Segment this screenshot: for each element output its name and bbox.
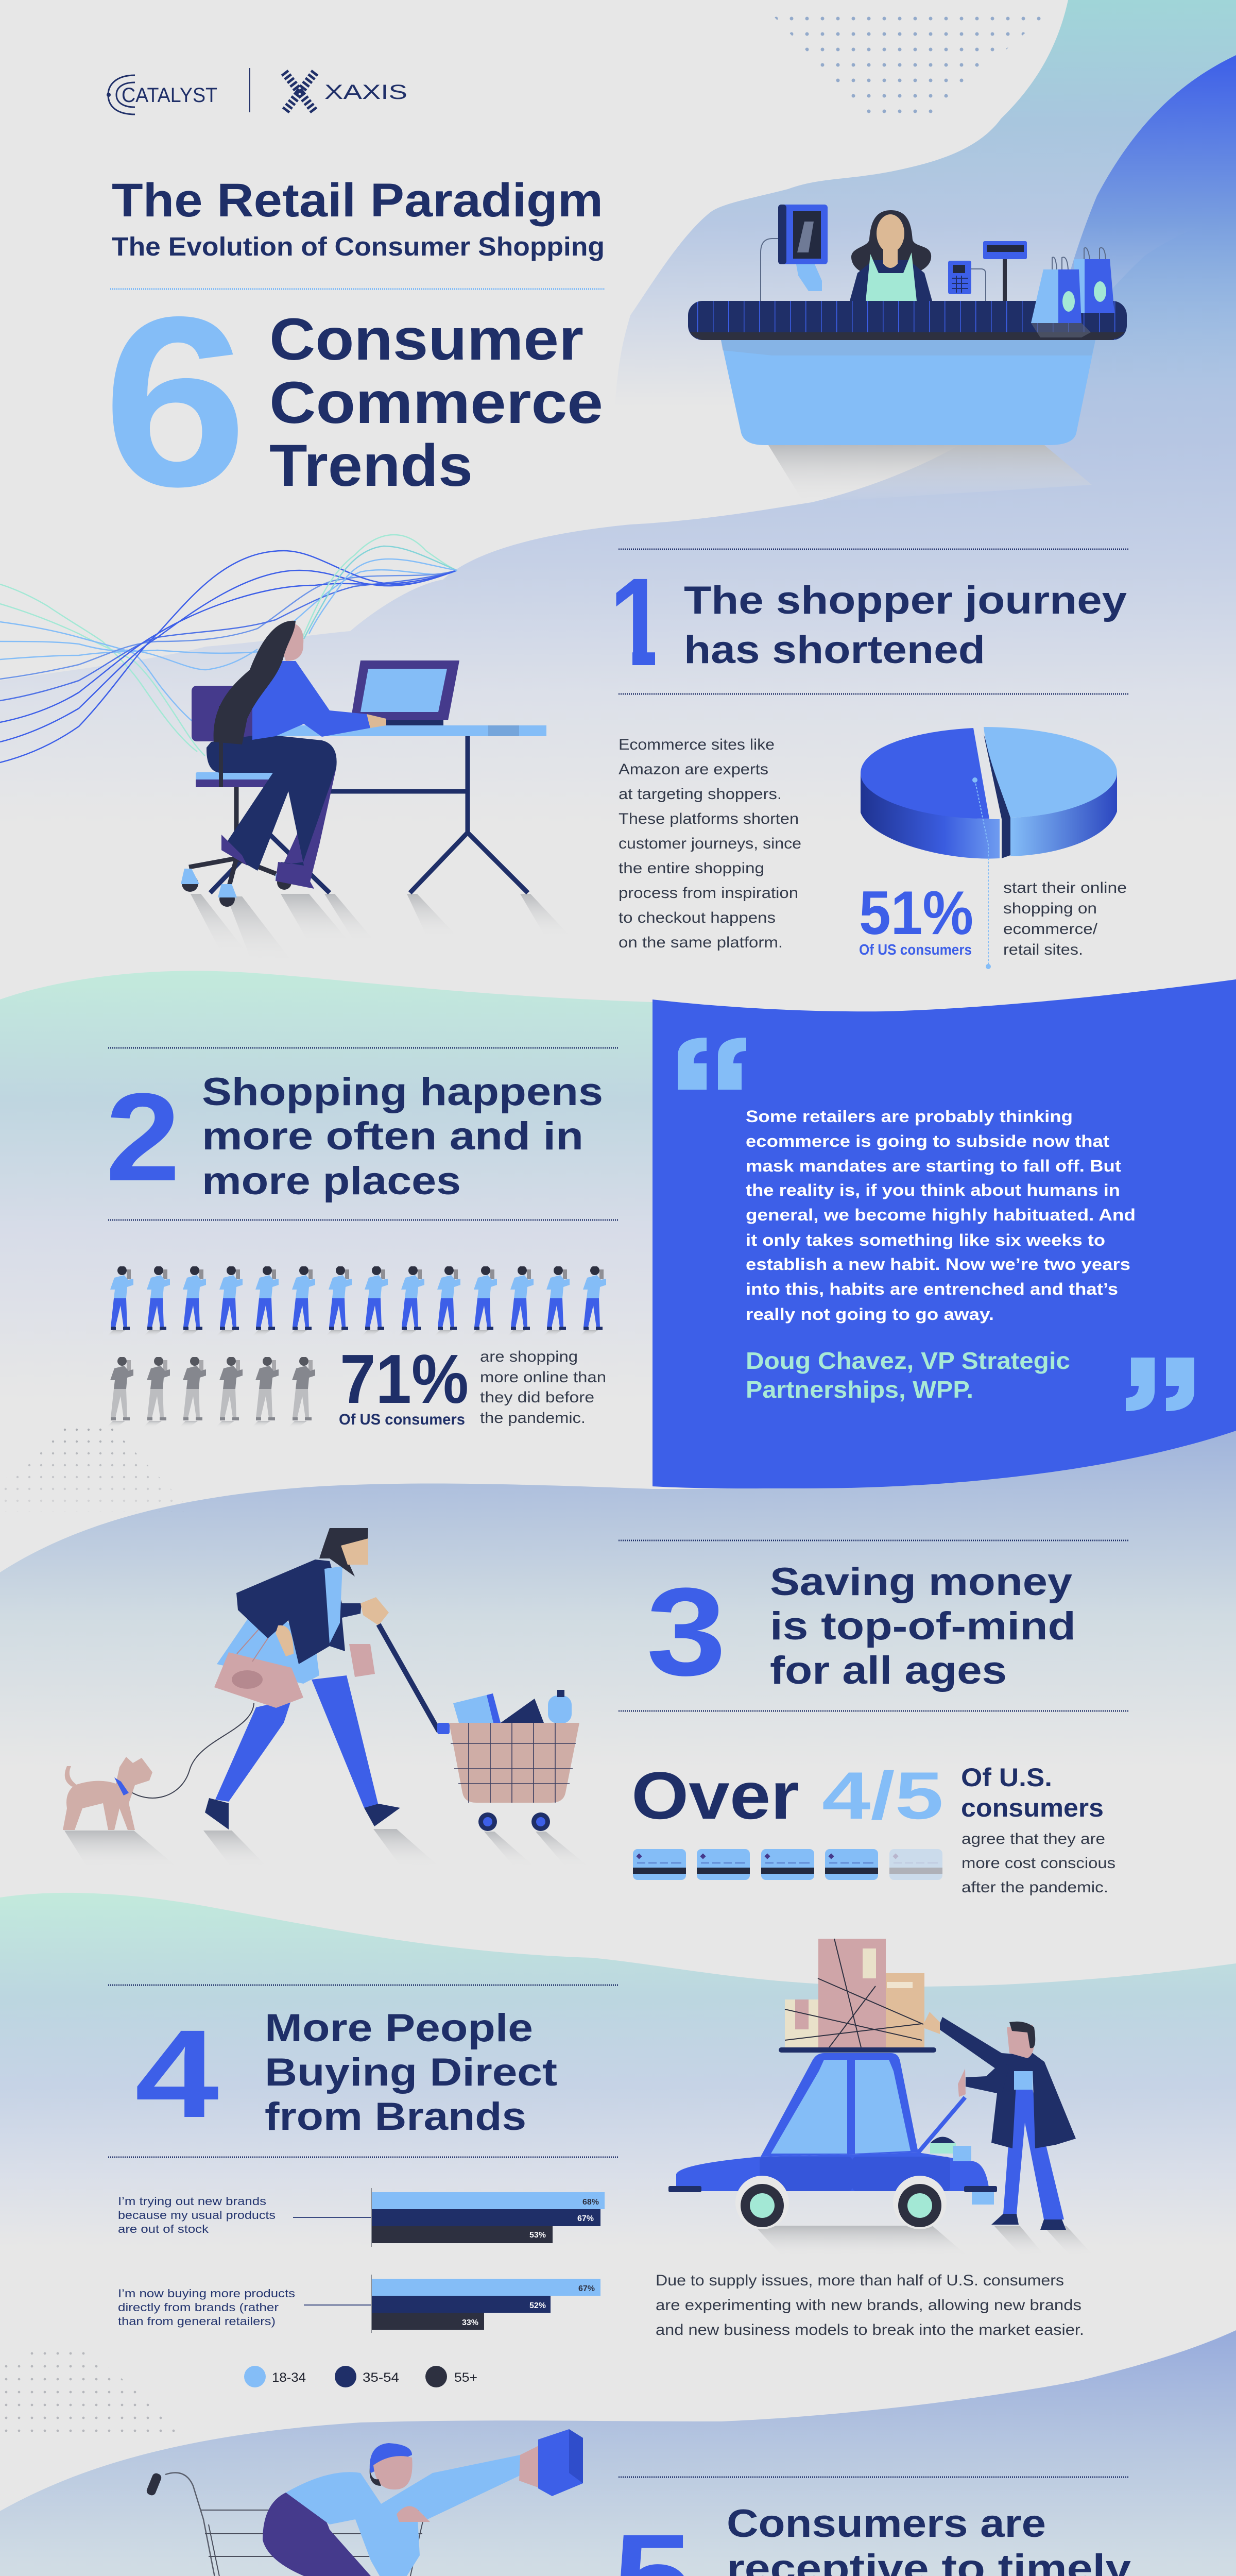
quote text: mask mandates are starting to fall off. But [746, 1157, 1121, 1175]
bar chart labels: brand buying: I’m trying out new brands [118, 2195, 266, 2208]
text block: ecommerce sites: process from inspiration [619, 885, 798, 902]
heading: trend 3 [646, 1560, 1076, 1702]
icon: closing quote [1126, 1358, 1194, 1411]
quote text: it only takes something like six weeks to [746, 1231, 1105, 1249]
text block: ecommerce sites: at targeting shoppers. [619, 786, 782, 803]
heading: trend 3: 3 [646, 1562, 726, 1702]
text block: start their online shopping: retail sites. [1003, 941, 1083, 958]
text block: ecommerce sites [619, 736, 801, 951]
background: section 2 mint wave [0, 971, 653, 1412]
heading: consumer commerce trends: Commerce [269, 370, 603, 436]
heading dividers section 4 [108, 1985, 619, 2157]
text: of US consumers [961, 1763, 1115, 1896]
text block: shopping more online [480, 1348, 606, 1427]
heading: trend 4: More People [265, 2006, 533, 2050]
illustration: woman at desk [181, 621, 572, 963]
legend: section 4: 55+ [454, 2370, 477, 2385]
text block: ecommerce sites: the entire shopping [619, 860, 764, 877]
bar chart: brand buying: 33% [462, 2318, 478, 2327]
text: of US consumers: after the pandemic. [962, 1879, 1108, 1896]
logo divider [249, 68, 250, 112]
legend: section 4: 18-34 [272, 2370, 306, 2385]
background: section 3 wave [0, 1406, 1236, 1767]
heading: trend 5 [613, 2502, 1131, 2576]
heading: trend 1: has shortened [684, 628, 985, 672]
illustration: car with boxes [668, 1939, 1094, 2257]
bar chart labels: brand buying: than from general retailers) [118, 2315, 276, 2328]
heading: trend 2: 2 [106, 1067, 180, 1207]
text block: shopping more online: the pandemic. [480, 1410, 586, 1427]
quote attribution: Doug Chavez, VP Strategic [746, 1347, 1070, 1374]
quote text: Some retailers are probably thinking [746, 1107, 1073, 1126]
text block: start their online shopping [1003, 879, 1127, 958]
text: of US consumers: consumers [961, 1793, 1104, 1822]
logo: Catalyst [107, 75, 217, 114]
quote text [746, 1107, 1136, 1324]
heading dividers section 5 [616, 2477, 1129, 2576]
quote text: ecommerce is going to subside now that [746, 1132, 1109, 1150]
heading: trend 4 [135, 2004, 557, 2144]
heading dividers section 2 [108, 1048, 619, 1220]
heading: trend 2 [106, 1067, 603, 1207]
bar chart: brand buying: 67% [577, 2214, 594, 2223]
heading: consumer commerce trends: Trends [269, 433, 473, 499]
icon: opening quote [678, 1038, 746, 1090]
bar chart: brand buying [293, 2188, 605, 2333]
legend: section 4 [244, 2366, 477, 2387]
heading: consumer commerce trends: Consumer [269, 307, 583, 372]
bar chart: brand buying: 68% [582, 2198, 599, 2207]
bar chart: brand buying: 53% [529, 2231, 546, 2240]
background: section 5 wave [0, 2330, 1236, 2576]
bar chart labels: brand buying [118, 2195, 295, 2328]
quote text: establish a new habit. Now we’re two years [746, 1255, 1130, 1274]
stat: 71%: Of US consumers [339, 1411, 465, 1428]
quote attribution [746, 1347, 1070, 1403]
heading: trend 3: is top-of-mind [770, 1604, 1076, 1648]
illustration: shopper with dog and cart [63, 1528, 590, 1868]
text block: start their online shopping: shopping on [1003, 900, 1097, 917]
stat: over 4/5 [631, 1758, 943, 1833]
heading dividers section 1 [619, 549, 1129, 694]
stat: 51%: 51% [859, 878, 973, 947]
big number 6: 6 [103, 266, 247, 537]
background: deep blue hero accent [1040, 55, 1236, 392]
background: section 4 mint wave [0, 1893, 1236, 2246]
stat: 71%: 71% [340, 1340, 469, 1418]
text block: ecommerce sites: These platforms shorten [619, 810, 799, 827]
heading: trend 2: Shopping happens [202, 1070, 603, 1114]
chart: 51% pie [861, 727, 1117, 969]
heading: trend 1 [616, 579, 1127, 665]
text block: supply issues: Due to supply issues, more than half of U.S. consumers [656, 2272, 1064, 2289]
text block: supply issues: are experimenting with new brands, allowing new brands [656, 2297, 1082, 2314]
quote text: the reality is, if you think about humans in [746, 1181, 1120, 1199]
decorative dots section 2 [4, 1428, 184, 1512]
illustration: person in shopping cart [145, 2429, 583, 2576]
text block: shopping more online: they did before [480, 1389, 594, 1406]
text block: ecommerce sites: Ecommerce sites like [619, 736, 775, 753]
heading: trend 3: for all ages [770, 1649, 1007, 1692]
text block: shopping more online: more online than [480, 1369, 606, 1386]
text block: ecommerce sites: to checkout happens [619, 909, 776, 926]
heading: trend 5: Consumers are [727, 2502, 1046, 2546]
text: of US consumers: Of U.S. [961, 1763, 1052, 1792]
heading: trend 3: Saving money [770, 1560, 1072, 1604]
decorative dots top [768, 11, 1051, 118]
heading: trend 2: more often and in [202, 1114, 583, 1158]
illustration: flowing data lines [0, 535, 457, 762]
title: The Retail Paradigm [112, 174, 603, 227]
quote text: general, we become highly habituated. And [746, 1206, 1136, 1224]
bar chart: brand buying: 67% [578, 2284, 595, 2293]
background: hero lower wave [0, 216, 1236, 824]
text block: ecommerce sites: Amazon are experts [619, 761, 768, 778]
text block: start their online shopping: ecommerce/ [1003, 921, 1098, 938]
text block: shopping more online: are shopping [480, 1348, 578, 1365]
stat: 51%: Of US consumers [859, 942, 972, 958]
heading: consumer commerce trends [269, 307, 603, 499]
logo: Xaxis: XAXIS [324, 81, 407, 104]
stat: over 4/5: 4/5 [822, 1758, 943, 1833]
pictogram: 71% of people [107, 1266, 606, 1427]
bar chart: brand buying: 52% [529, 2301, 546, 2310]
heading: trend 4: from Brands [265, 2095, 526, 2139]
heading: trend 2: more places [202, 1159, 461, 1203]
illustration: checkout counter with cashier [688, 205, 1127, 503]
bar chart labels: brand buying: directly from brands (rather [118, 2301, 279, 2314]
text block: ecommerce sites: customer journeys, since [619, 835, 801, 852]
pictogram: credit cards [633, 1849, 942, 1880]
background: hero wave [615, 0, 1236, 407]
stat: over 4/5: Over [631, 1758, 799, 1833]
bar chart labels: brand buying: because my usual products [118, 2209, 276, 2222]
text: of US consumers: agree that they are [962, 1831, 1105, 1848]
heading: trend 4: 4 [135, 2004, 219, 2144]
heading dividers section 3 [619, 1540, 1129, 1711]
quote text: really not going to go away. [746, 1305, 994, 1324]
logo: Catalyst: CATALYST [122, 84, 217, 107]
subtitle: The Evolution of Consumer Shopping [112, 232, 605, 261]
quote text: into this, habits are entrenched and that’s [746, 1280, 1118, 1298]
panel: quote background [653, 979, 1236, 1488]
quote attribution: Partnerships, WPP. [746, 1376, 973, 1403]
heading: trend 1: 1 [609, 552, 666, 692]
text: of US consumers: more cost conscious [962, 1855, 1115, 1872]
heading: trend 1: The shopper journey [684, 579, 1127, 622]
text block: ecommerce sites: on the same platform. [619, 934, 783, 951]
bar chart labels: brand buying: I’m now buying more products [118, 2287, 295, 2300]
text block: start their online shopping: start their online [1003, 879, 1127, 896]
text block: supply issues: and new business models to break into the market easier. [656, 2321, 1084, 2338]
heading: trend 4: Buying Direct [265, 2050, 557, 2094]
text block: supply issues [656, 2272, 1084, 2338]
legend: section 4: 35-54 [363, 2370, 399, 2385]
logo: Xaxis [284, 72, 407, 112]
bar chart labels: brand buying: are out of stock [118, 2223, 209, 2235]
decorative dots section 4 [0, 2347, 193, 2439]
